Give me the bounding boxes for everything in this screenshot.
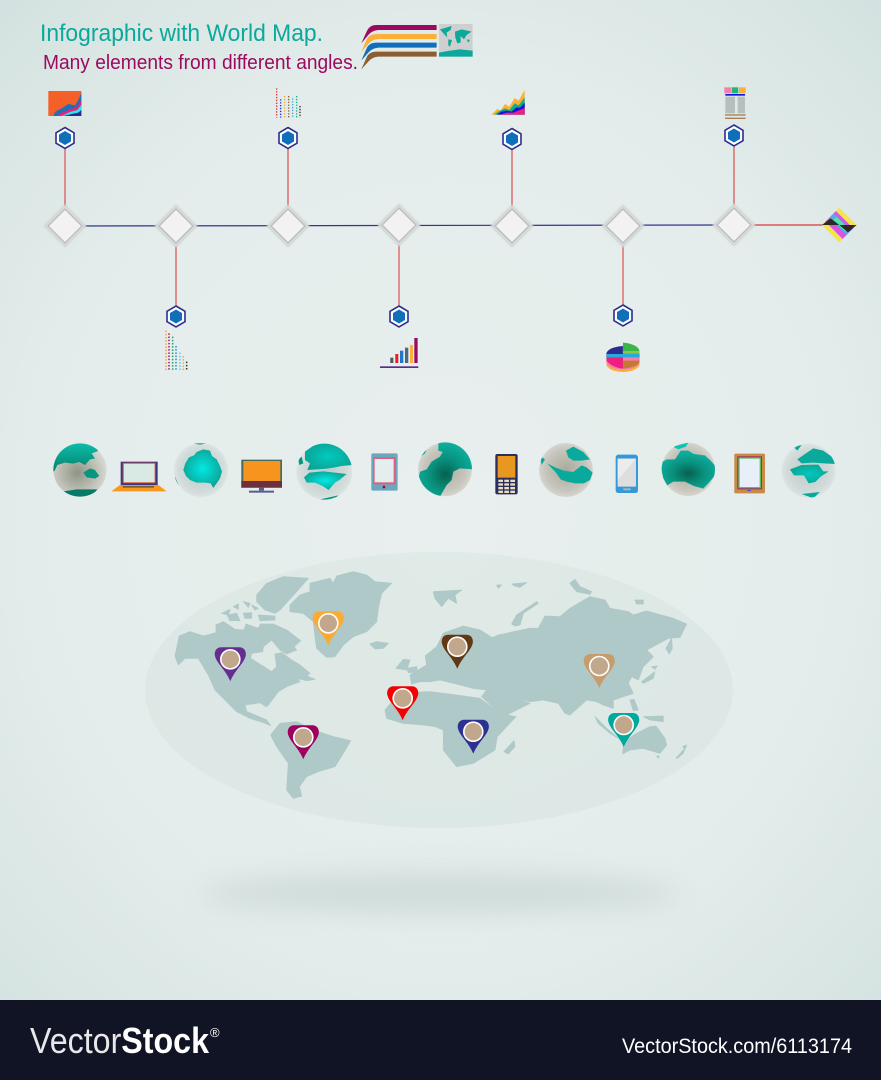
South America — [271, 722, 351, 798]
footer logo: ® — [210, 1025, 220, 1040]
Arctic Russia islands — [433, 579, 643, 626]
pin: navy — [458, 720, 489, 754]
icon: orange area chart — [48, 91, 81, 116]
Southeast Asia and Oceania — [595, 716, 663, 738]
pin: orange — [313, 611, 344, 645]
footer logo: VectorStock — [30, 1020, 210, 1061]
hexagon centres — [59, 128, 740, 324]
icon: laptop — [111, 462, 167, 491]
pin: purple — [215, 647, 246, 681]
world map — [175, 572, 687, 798]
icon: dotted bar chart bottom — [166, 331, 187, 371]
footer image id: VectorStock.com/6113174 — [622, 1035, 852, 1058]
pin: tan — [584, 654, 615, 688]
icon: framed tablet — [734, 454, 765, 493]
blue axis line — [65, 225, 734, 226]
title: Infographic with World Map. — [40, 20, 323, 47]
timeline — [45, 125, 835, 327]
icon: stacked area chart — [491, 90, 525, 115]
globe row left — [52, 440, 398, 502]
footer bar — [0, 1000, 881, 1080]
globe: Russia and Asia view — [660, 443, 717, 496]
map oval panel — [145, 552, 733, 828]
icon: smartphone — [616, 455, 638, 493]
globe: Antarctica view — [173, 443, 228, 497]
globe: Africa view — [782, 444, 836, 498]
Arctic islands — [222, 577, 308, 621]
globe: Asia dark view — [418, 441, 473, 497]
Eurasia — [410, 597, 687, 715]
red axis segment — [734, 224, 835, 226]
Madagascar and New Zealand — [504, 741, 687, 758]
Iceland, UK islands — [370, 642, 417, 673]
globe: Oceania view — [52, 440, 107, 498]
icon: 3D pie chart — [606, 343, 640, 372]
red connectors — [65, 135, 734, 316]
North America — [175, 622, 315, 726]
pin: magenta — [288, 725, 319, 759]
Australia — [623, 726, 667, 754]
icon: multicolour diamond arrow head — [822, 208, 857, 242]
globe: Arctic and North America view — [539, 443, 593, 497]
pin: red — [387, 686, 418, 720]
globe: Europe and Africa view — [296, 443, 352, 502]
subtitle: Many elements from different angles. — [43, 52, 358, 74]
pin: teal — [608, 713, 639, 747]
icon: column layout chart — [724, 87, 746, 119]
icon: keypad mobile phone — [495, 454, 518, 494]
Africa — [385, 692, 516, 767]
icon: growing bar chart — [380, 338, 418, 368]
node diamonds — [45, 205, 754, 246]
icon: dotted bar chart top — [277, 88, 300, 118]
icon: desktop monitor — [241, 460, 282, 493]
globe row right — [418, 441, 836, 498]
hexagon markers — [56, 125, 743, 327]
pin: brown — [442, 635, 473, 669]
icon: coloured ribbons — [361, 25, 437, 69]
Japan and Sakhalin — [630, 638, 672, 711]
icon: small world map tile — [439, 24, 473, 57]
icon: tablet — [371, 453, 398, 491]
map floor shadow — [200, 873, 680, 913]
Greenland — [290, 572, 392, 657]
